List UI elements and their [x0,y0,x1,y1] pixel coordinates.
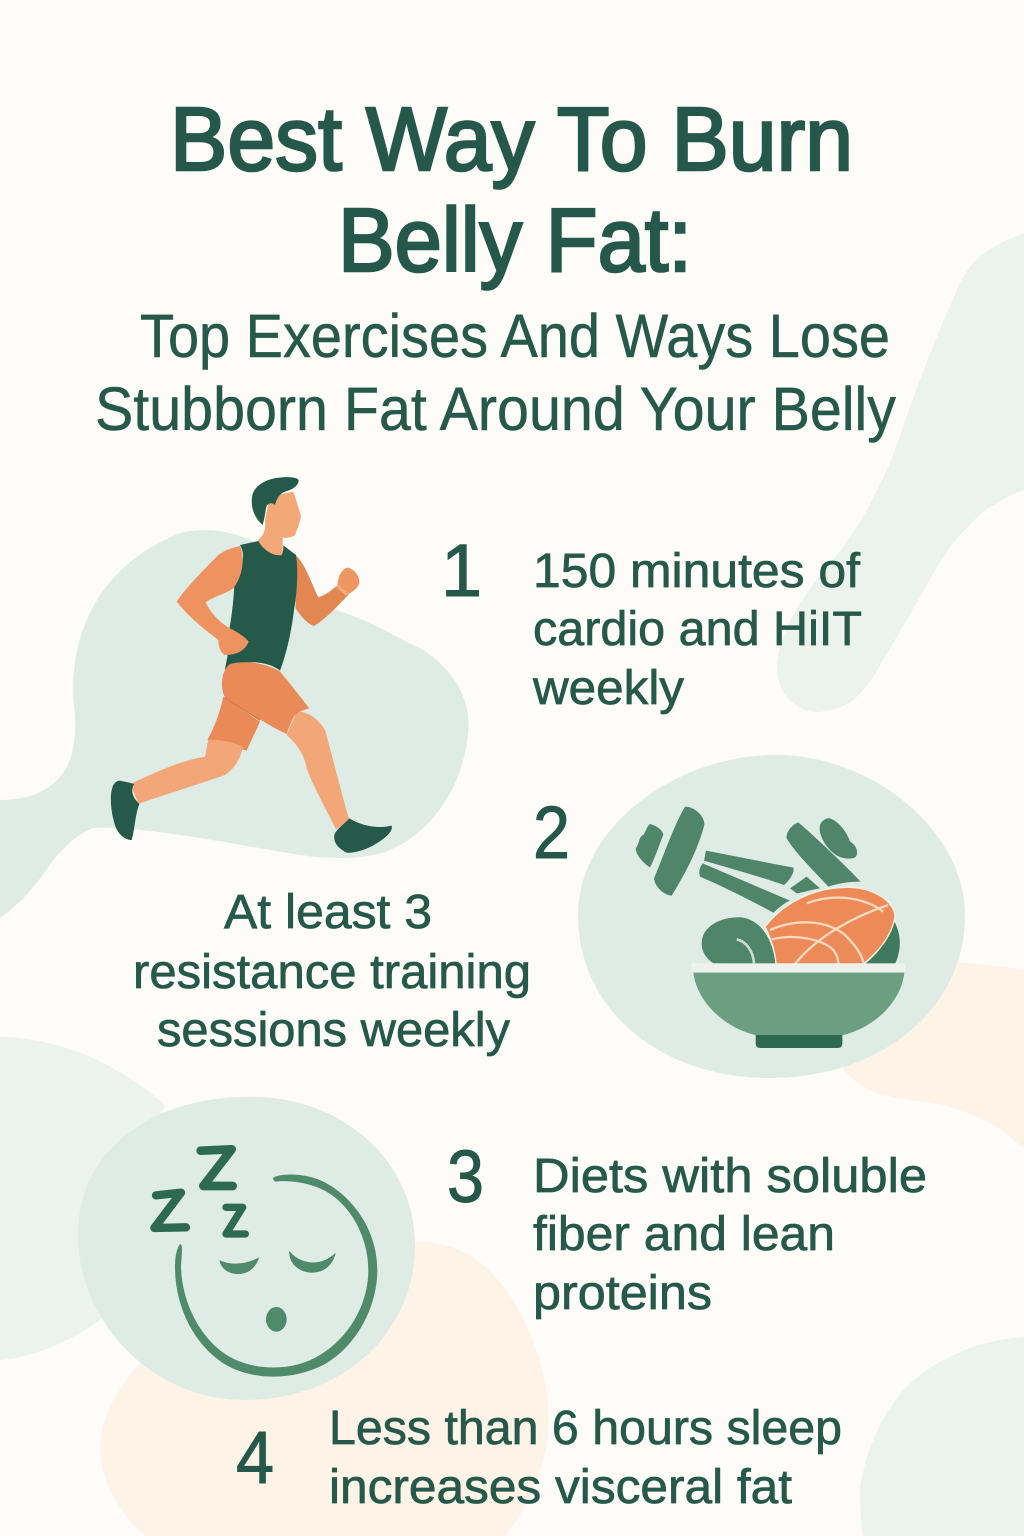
tank top [225,541,297,671]
number 4: 4 [236,1416,274,1499]
face outline [175,1175,377,1377]
step 3 text: Diets with soluble [533,1150,927,1203]
panel: runner backdrop blob [0,530,469,918]
front shoe [334,818,392,853]
subtitle [95,302,896,443]
bowl foot [756,1035,842,1048]
title: Belly Fat: [338,191,692,291]
icon: sleeping face [154,1149,377,1377]
icon: runner [111,477,392,853]
hair [252,477,299,525]
step 3 text: fiber and lean [533,1208,835,1261]
title [170,90,853,291]
number 3: 3 [447,1135,484,1218]
panel: food backdrop circle [578,755,965,1078]
rear shoe [111,781,139,840]
step 4 text: Less than 6 hours sleep [329,1402,842,1455]
step 1 text: 150 minutes of [533,545,861,598]
number 1: 1 [441,529,482,612]
step 3 text [533,1150,927,1320]
step 2 text: At least 3 [224,886,432,939]
step 3 text: proteins [533,1267,712,1320]
rear thigh shorts [207,697,260,751]
step 1 text: weekly [532,662,684,715]
closed eyes [219,1257,259,1274]
dumbbell [636,824,663,867]
fist [337,568,359,595]
mouth [266,1307,287,1332]
step 4 text [329,1402,842,1514]
front arm [177,546,249,655]
front leg [287,712,349,829]
subtitle: Top Exercises And Ways Lose [140,302,890,370]
step 2 text: resistance training [133,946,531,999]
step 1 text [532,545,862,715]
shorts [222,662,309,734]
greens [702,917,776,964]
panel: sleep backdrop circle [78,1097,415,1400]
subtitle: Stubborn Fat Around Your Belly [95,375,896,443]
rear leg [131,740,243,804]
number 2: 2 [533,791,570,874]
step 4 text: increases visceral fat [329,1461,792,1514]
icon: dumbbell and salmon bowl [636,807,905,1048]
zzz [154,1149,245,1234]
neck and face [258,492,301,560]
bowl rim [692,963,905,972]
step 2 text [133,886,531,1057]
salmon [765,887,895,964]
back arm [295,555,348,626]
title: Best Way To Burn [170,90,853,190]
bowl [693,973,904,1035]
step 2 text: sessions weekly [157,1004,510,1057]
step 1 text: cardio and HiIT [533,603,862,656]
